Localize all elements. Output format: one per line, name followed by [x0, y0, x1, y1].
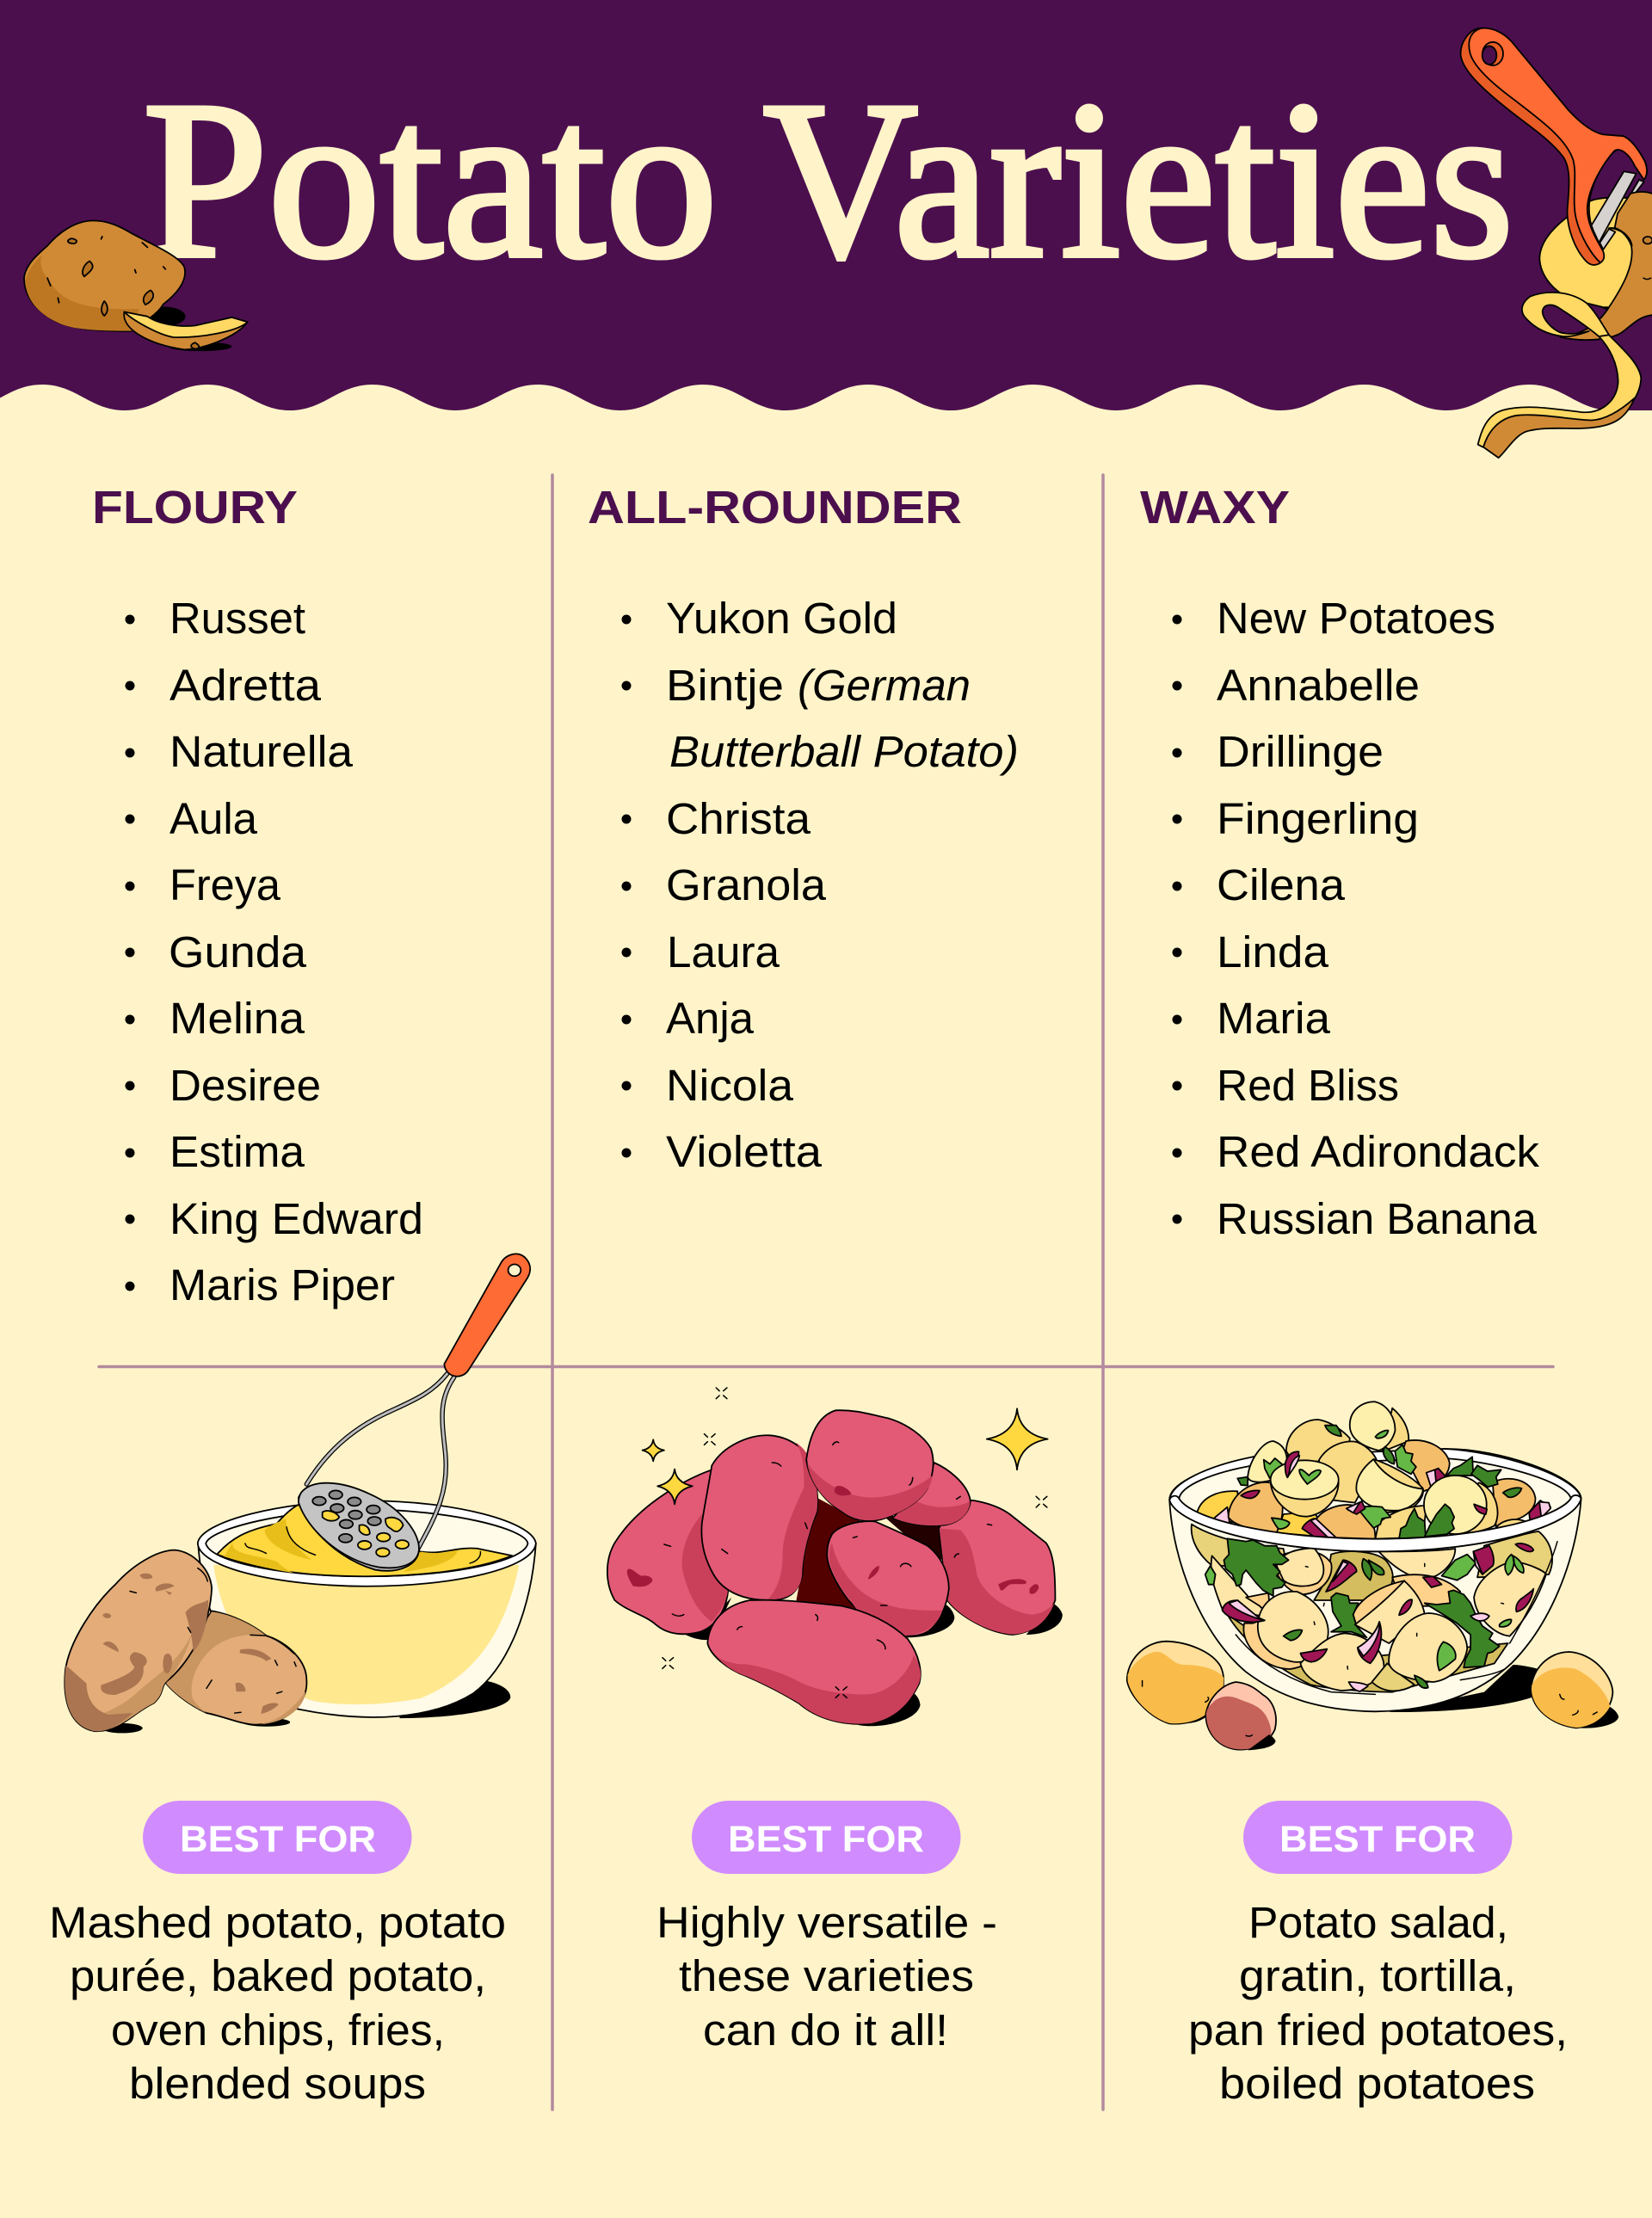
illustration: potato salad in glass bowl [1127, 1402, 1618, 1750]
text: floury uses [49, 1898, 506, 2108]
heading: waxy: WAXY [1140, 482, 1290, 533]
list: waxy varieties: Red Adirondack [1217, 1127, 1540, 1176]
text: all-rounder uses: these varieties [679, 1951, 974, 2000]
list: waxy varieties: Annabelle [1217, 661, 1420, 710]
list: waxy varieties [1172, 594, 1540, 1243]
title: Potato [143, 55, 718, 305]
list: waxy varieties: Cilena [1217, 860, 1346, 909]
list: all-rounder varieties [621, 594, 1019, 1176]
text: all-rounder uses: can do it all! [703, 2005, 948, 2055]
text: waxy uses: Potato salad, [1248, 1898, 1508, 1947]
list: floury varieties: King Edward [170, 1194, 423, 1243]
list: all-rounder varieties: Violetta [666, 1127, 823, 1176]
text: waxy uses: gratin, tortilla, [1239, 1951, 1516, 2000]
list: floury varieties: Freya [170, 860, 281, 909]
list: all-rounder varieties: Yukon Gold [666, 594, 897, 643]
best for pill: waxy: BEST FOR [1279, 1819, 1476, 1860]
list: all-rounder varieties: Nicola [666, 1061, 794, 1110]
heading: floury: FLOURY [92, 482, 298, 533]
title: Varieties [763, 55, 1513, 305]
list: floury varieties: Naturella [170, 727, 354, 776]
best for pill: waxy [1243, 1801, 1513, 1874]
illustration: masher, mash bowl and russet potatoes [65, 1254, 536, 1733]
best for pill: all-rounder: BEST FOR [728, 1819, 924, 1860]
text: waxy uses [1188, 1898, 1568, 2108]
text: waxy uses: boiled potatoes [1219, 2059, 1535, 2108]
list: all-rounder varieties: Granola [666, 860, 827, 909]
list: floury varieties: Gunda [169, 927, 307, 977]
text: all-rounder uses [656, 1898, 997, 2055]
best for pill: floury: BEST FOR [180, 1819, 376, 1860]
icon: orange peeler and peeled potato [1461, 28, 1652, 458]
text: floury uses: purée, baked potato, [70, 1951, 486, 2000]
text: floury uses: blended soups [129, 2059, 426, 2108]
list: floury varieties [126, 594, 423, 1309]
list: floury varieties: Maris Piper [170, 1260, 395, 1309]
list: floury varieties: Desiree [170, 1061, 321, 1110]
list: floury varieties: Adretta [170, 661, 322, 710]
illustration: pile of red potatoes with sparkles [607, 1388, 1063, 1726]
list: waxy varieties: Drillinge [1217, 727, 1384, 776]
best for pill: floury [143, 1801, 411, 1874]
list: floury varieties: Melina [170, 994, 305, 1043]
text: all-rounder uses: Highly versatile - [656, 1898, 997, 1947]
title [143, 55, 1513, 305]
list: waxy varieties: Linda [1217, 927, 1329, 977]
text: floury uses: Mashed potato, potato [49, 1898, 506, 1947]
list: all-rounder varieties: Butterball Potato) [669, 727, 1019, 776]
list: waxy varieties: Red Bliss [1217, 1061, 1399, 1110]
text: floury uses: oven chips, fries, [111, 2005, 445, 2055]
list: waxy varieties: New Potatoes [1217, 594, 1495, 643]
column dividers [99, 475, 1553, 2110]
list: floury varieties: Estima [170, 1127, 305, 1176]
heading: all-rounder: ALL-ROUNDER [588, 482, 962, 533]
list: all-rounder varieties: Anja [666, 994, 755, 1043]
list: all-rounder varieties: Bintje [666, 661, 784, 710]
icon: whole potato with peel [24, 220, 248, 351]
best for pill: all-rounder [692, 1801, 960, 1874]
list: floury varieties: Aula [170, 794, 258, 843]
list: floury varieties: Russet [170, 594, 305, 643]
list: waxy varieties: Fingerling [1217, 794, 1419, 843]
list: waxy varieties: Maria [1217, 994, 1331, 1043]
list: all-rounder varieties: (German [798, 661, 971, 710]
list: all-rounder varieties: Laura [667, 927, 780, 977]
list: all-rounder varieties: Christa [666, 794, 811, 843]
text: waxy uses: pan fried potatoes, [1188, 2005, 1568, 2055]
list: waxy varieties: Russian Banana [1217, 1194, 1538, 1243]
purple header with wavy edge [0, 0, 1652, 410]
